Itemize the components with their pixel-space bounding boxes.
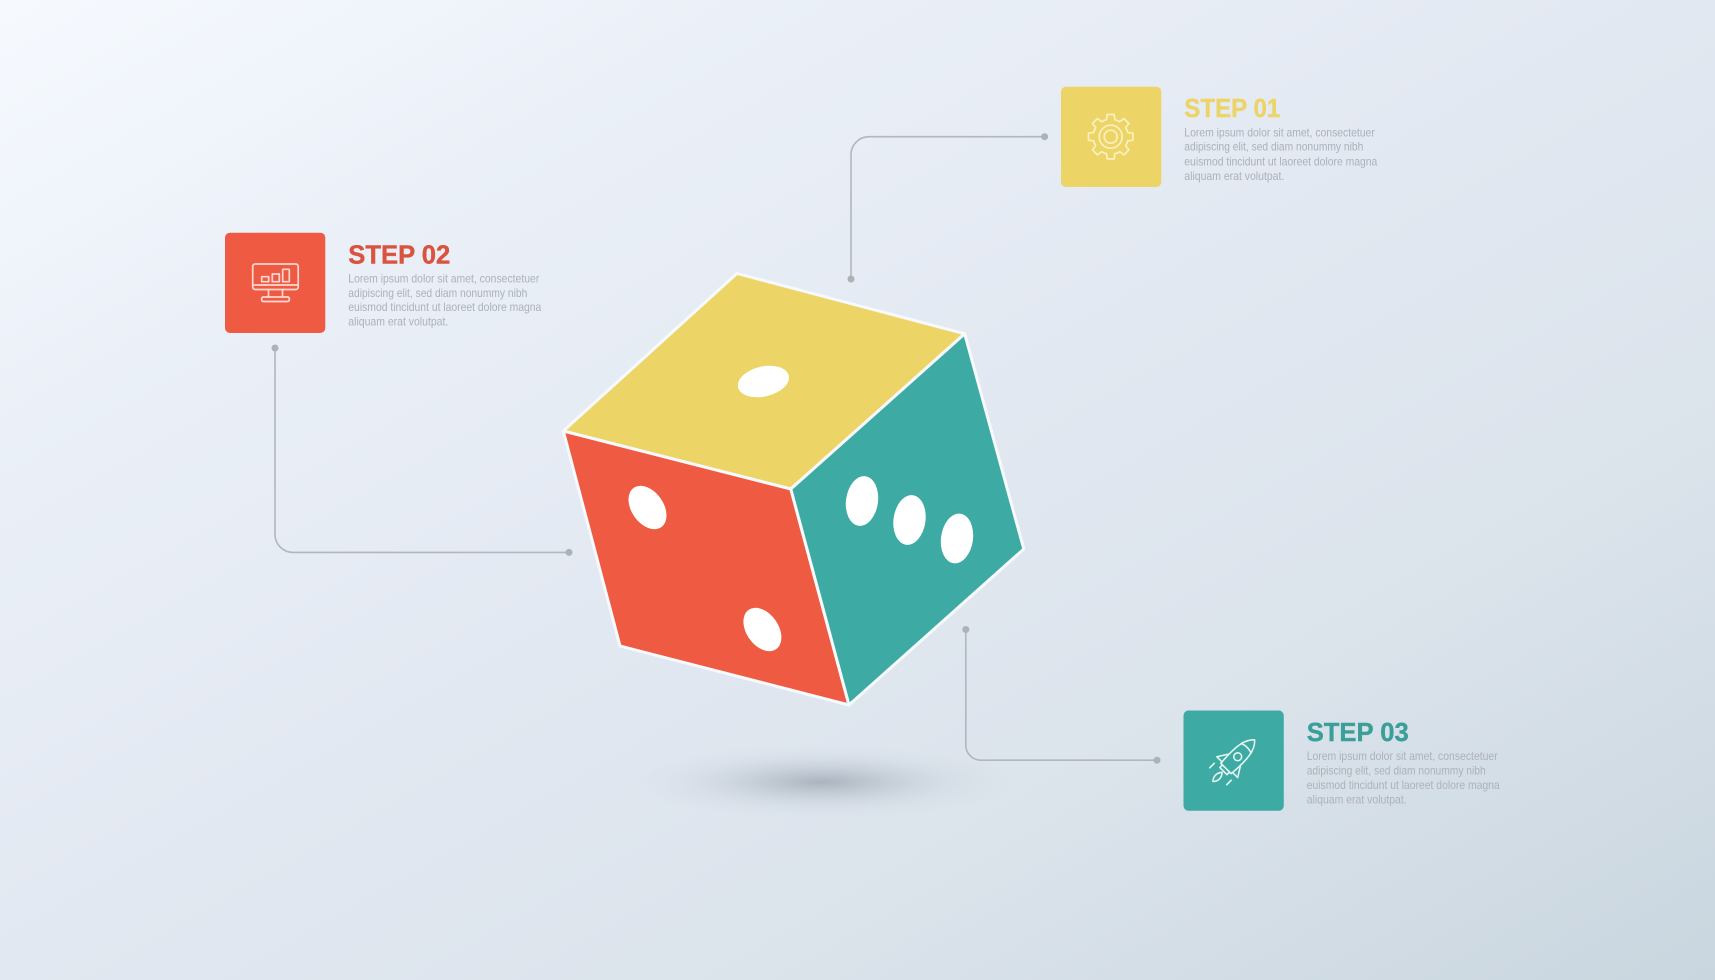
text block: step 03: adipiscing elit, sed diam nonummy nibh <box>1307 764 1486 778</box>
icon tile: gear <box>1061 87 1161 187</box>
dice <box>563 273 1024 705</box>
dice face: teal right <box>791 334 1024 705</box>
text block: step 03 <box>1307 749 1500 807</box>
heading: step 01: STEP 01 <box>1184 93 1280 123</box>
panel: step 03 <box>1184 710 1500 811</box>
icon tile: rocket <box>1184 710 1284 811</box>
text block: step 02 <box>348 272 542 329</box>
text block: step 01 <box>1184 125 1378 183</box>
text block: step 03: Lorem ipsum dolor sit amet, consectetuer <box>1307 749 1498 763</box>
connector: step 01 <box>848 133 1048 282</box>
text block: step 01: adipiscing elit, sed diam nonummy nibh <box>1184 140 1363 154</box>
dice face: red left <box>563 431 849 705</box>
text block: step 01: Lorem ipsum dolor sit amet, consectetuer <box>1184 125 1375 139</box>
panel: step 01 <box>1061 87 1378 187</box>
text block: step 01: aliquam erat volutpat. <box>1184 169 1284 183</box>
connector: step 02 <box>272 344 572 556</box>
text block: step 02: adipiscing elit, sed diam nonummy nibh <box>348 286 527 300</box>
panel: step 02 <box>225 233 542 333</box>
heading: step 03: STEP 03 <box>1307 717 1409 747</box>
text block: step 01: euismod tincidunt ut laoreet dolore magna <box>1184 154 1378 168</box>
heading: step 02: STEP 02 <box>348 239 450 269</box>
connector: step 03 <box>962 626 1160 764</box>
dice shadow <box>627 744 1017 820</box>
text block: step 03: euismod tincidunt ut laoreet dolore magna <box>1307 778 1500 792</box>
text block: step 02: aliquam erat volutpat. <box>348 315 448 329</box>
dice face: yellow top <box>563 273 965 489</box>
text block: step 02: Lorem ipsum dolor sit amet, consectetuer <box>348 272 539 286</box>
text block: step 03: aliquam erat volutpat. <box>1307 793 1407 807</box>
icon tile: monitor chart <box>225 233 325 333</box>
text block: step 02: euismod tincidunt ut laoreet dolore magna <box>348 300 542 314</box>
